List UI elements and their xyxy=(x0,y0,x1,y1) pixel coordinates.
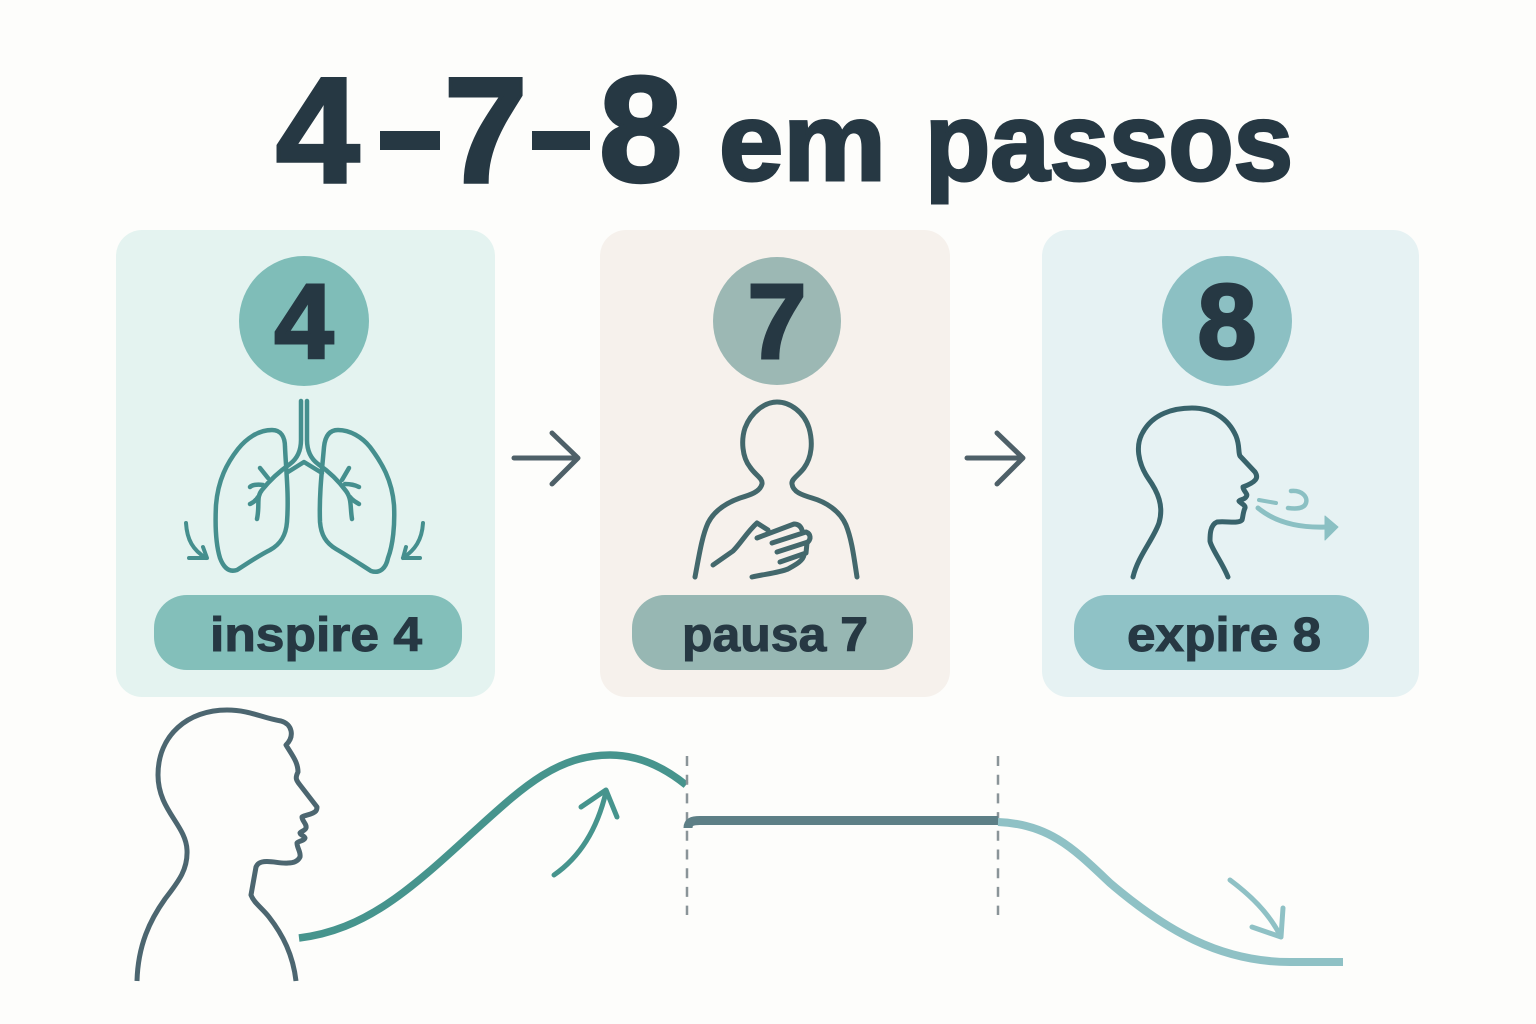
icon: person with hand on chest xyxy=(695,402,857,577)
arrow: exhale direction xyxy=(1230,880,1283,937)
icon: lungs xyxy=(216,401,394,572)
label: inspire 4 xyxy=(154,595,462,670)
panel: inspire xyxy=(116,230,495,697)
title: passos xyxy=(925,81,1293,204)
number badge 7: 7 xyxy=(748,263,806,381)
title: em xyxy=(719,81,886,204)
label: pausa 7 xyxy=(632,595,913,670)
label: expire 8: expire 8 xyxy=(1127,609,1321,662)
number badge 4: 4 xyxy=(275,263,334,381)
phase dividers xyxy=(687,756,998,915)
label: inspire 4: inspire 4 xyxy=(210,609,422,662)
title: 7 xyxy=(444,46,527,214)
breath curve: exhale xyxy=(998,822,1343,962)
icon: arrow right of lungs xyxy=(403,523,423,558)
number badge 8 xyxy=(1162,256,1292,386)
breath curve: hold xyxy=(688,820,998,828)
panel: expire xyxy=(1042,230,1419,697)
title: 4 xyxy=(276,46,359,214)
title: – xyxy=(380,71,440,194)
icon: exhaled air xyxy=(1258,491,1338,540)
title: – xyxy=(532,71,590,194)
label: expire 8 xyxy=(1074,595,1369,670)
icon: arrow left of lungs xyxy=(186,523,207,558)
panel: pausa xyxy=(600,230,950,697)
arrow: step 2 to step 3 xyxy=(967,433,1023,484)
title: 8 xyxy=(599,45,682,213)
icon: head exhaling xyxy=(1133,408,1257,577)
arrow: inhale direction xyxy=(554,790,617,875)
number badge 7 xyxy=(713,257,841,385)
number badge 8: 8 xyxy=(1198,263,1256,381)
label: pausa 7: pausa 7 xyxy=(682,609,868,662)
icon: person profile inhaling xyxy=(137,710,317,981)
number badge 4 xyxy=(239,256,369,386)
arrow: step 1 to step 2 xyxy=(514,433,578,484)
title xyxy=(276,45,1293,214)
breath curve: inhale xyxy=(299,755,686,938)
